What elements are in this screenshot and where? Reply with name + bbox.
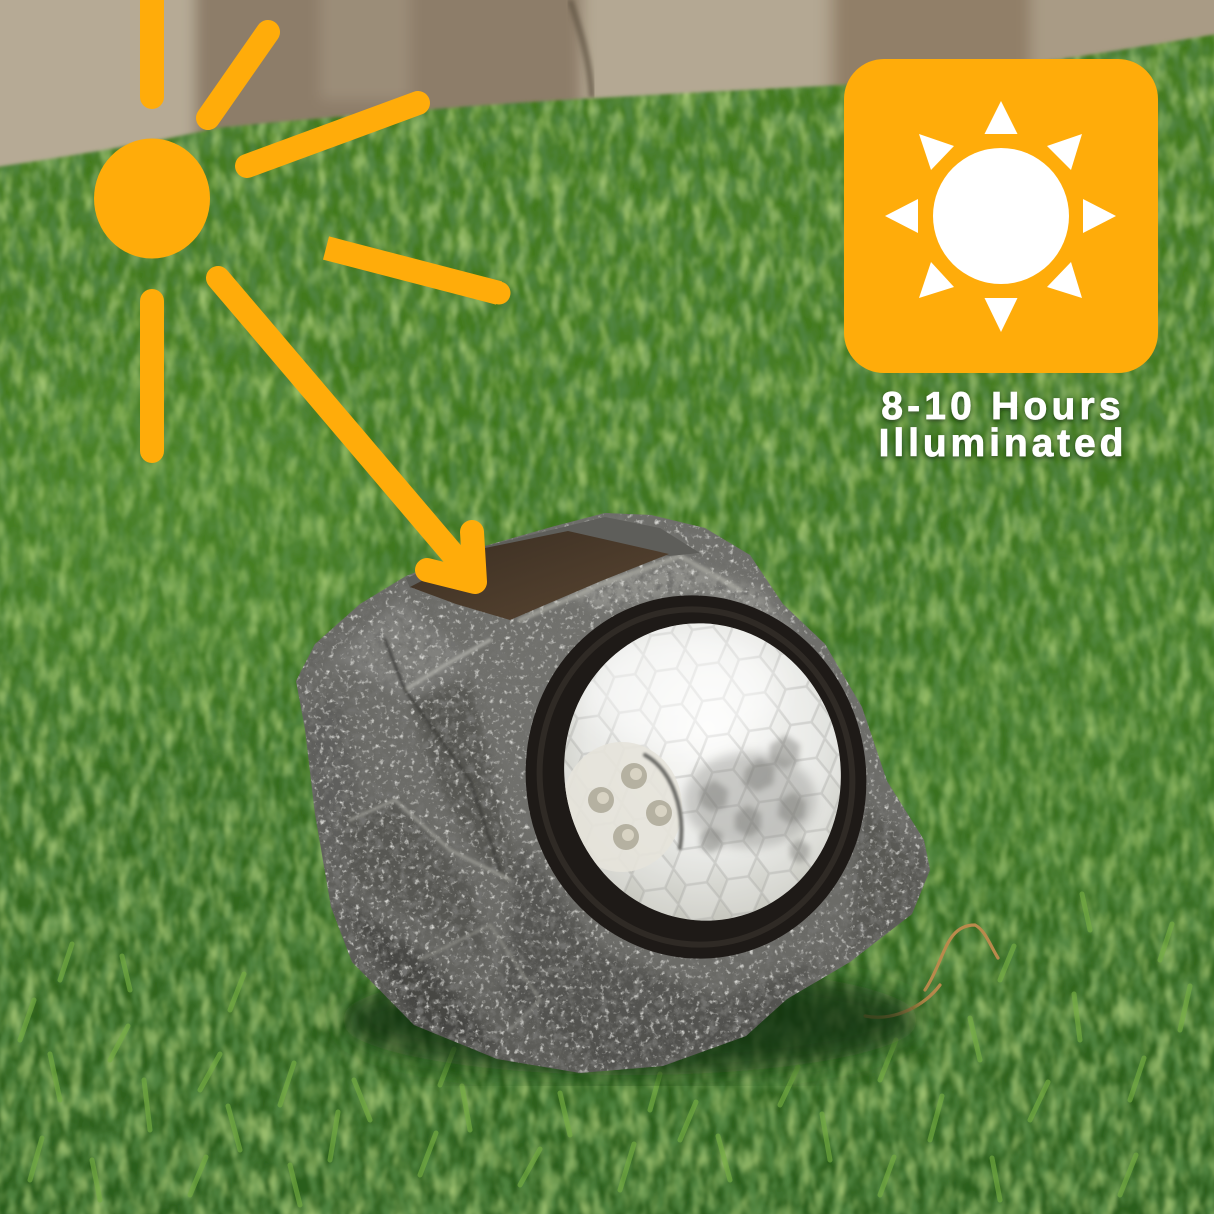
lens dark facets [684, 752, 816, 848]
ray upper right [208, 32, 268, 118]
icon: sun [885, 101, 1116, 332]
ray right [247, 103, 418, 166]
caption: 8-10 Hours [881, 385, 1125, 428]
rock shadow [340, 965, 920, 1075]
rock ridges [350, 556, 740, 1030]
badge: illumination time [844, 59, 1158, 465]
solar panel recess [406, 517, 700, 588]
ray up [140, 0, 164, 97]
arrow to solar panel [218, 278, 475, 582]
background wall [0, 0, 1214, 200]
ray lower right tip [488, 282, 510, 304]
rock body [290, 505, 940, 1080]
sun graphic with rays [94, 0, 510, 582]
sun disc [94, 138, 210, 258]
badge background [844, 59, 1158, 373]
lens ring [497, 568, 895, 986]
foreground grass blades [20, 894, 1190, 1205]
lighter lawn patches [0, 370, 380, 710]
rock facets [300, 560, 930, 1070]
lens [564, 623, 841, 921]
solar panel [410, 531, 669, 620]
ray lower right [326, 248, 499, 293]
wall joint [570, 0, 592, 98]
ray down [140, 301, 164, 451]
caption: Illuminated [879, 422, 1127, 465]
caption [879, 385, 1127, 465]
LED cluster [562, 742, 682, 872]
dry grass strands [865, 925, 998, 1017]
solar rock light [290, 505, 940, 1080]
